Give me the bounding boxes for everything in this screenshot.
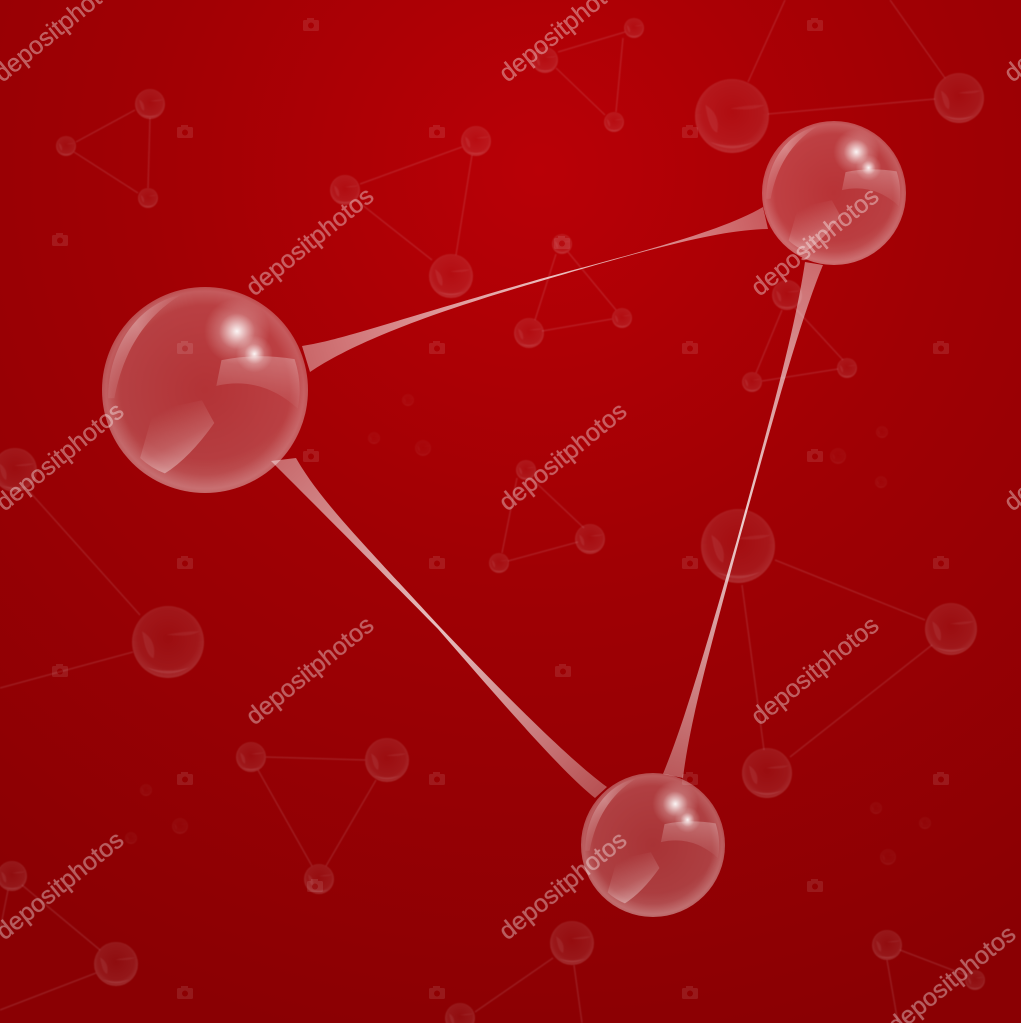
main bond: left to top right (302, 207, 768, 372)
main sphere: top right (762, 121, 906, 265)
watermark text: depositphotos (241, 611, 379, 731)
main bond: top right to bottom (663, 262, 823, 778)
main sphere: bottom (581, 773, 725, 917)
watermark text: depositphotos (746, 182, 884, 302)
watermark text: depositphotos (241, 182, 379, 302)
watermark text: depositphotos (746, 611, 884, 731)
watermark text: depositphotos (494, 397, 632, 517)
watermark text: depositphotos (494, 826, 632, 946)
main sphere: left (102, 287, 308, 493)
main bond: left to bottom (271, 458, 607, 798)
